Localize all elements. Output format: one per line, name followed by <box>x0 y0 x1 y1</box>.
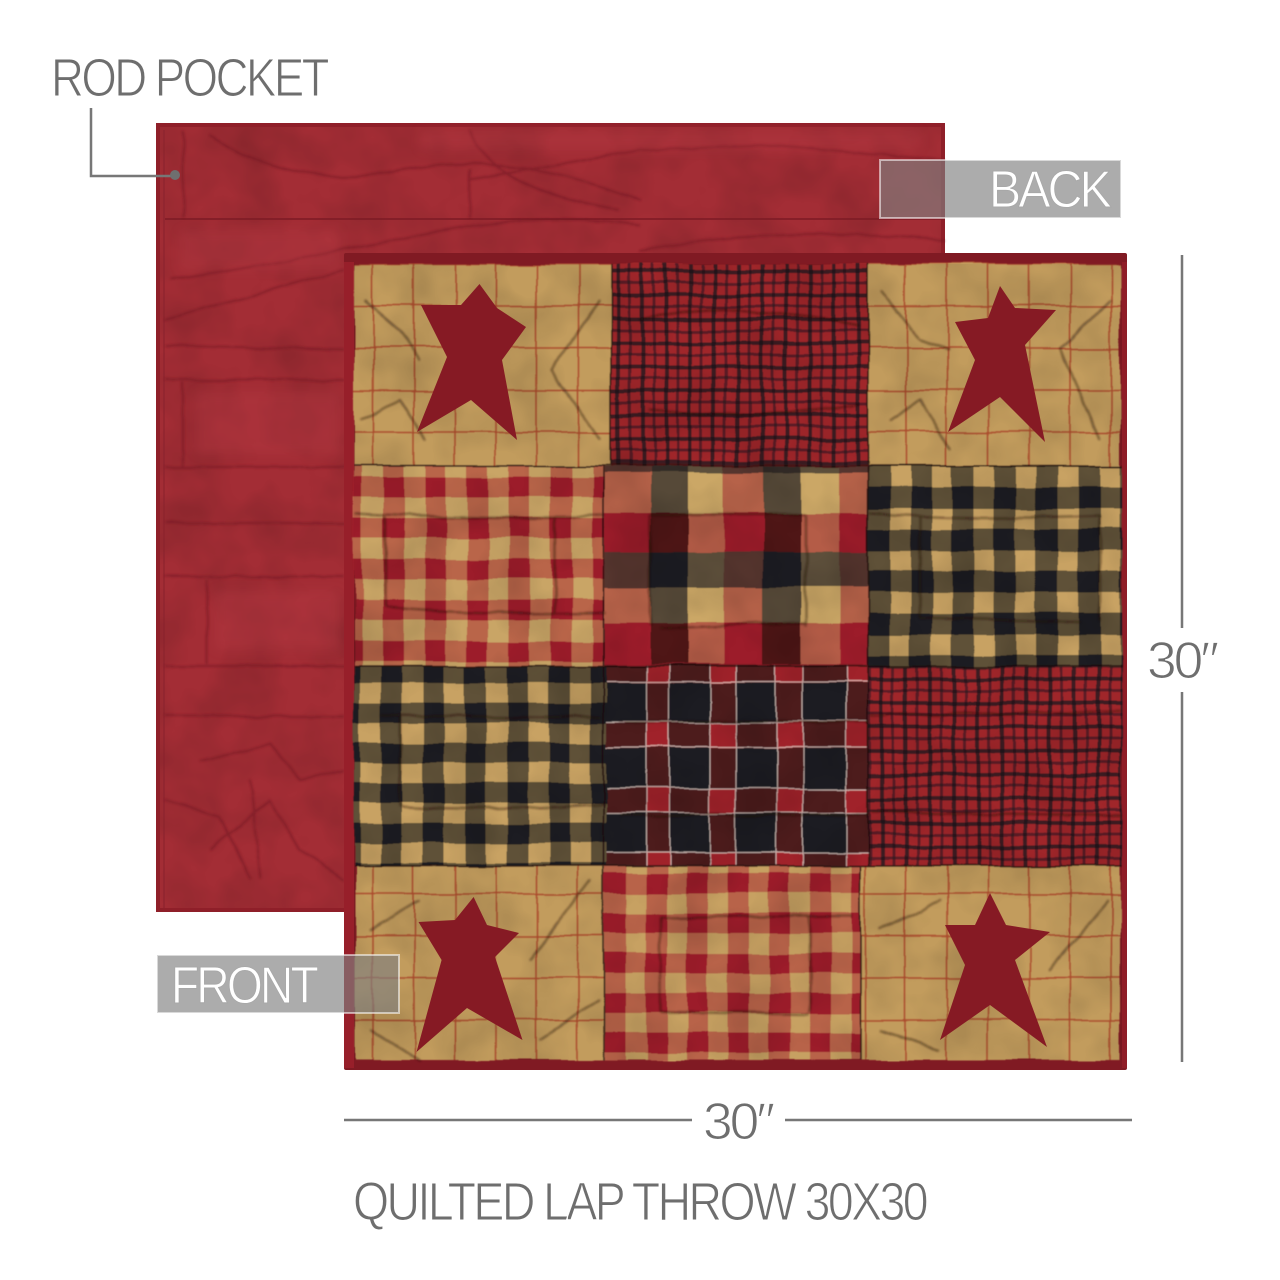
icon: star bottom left <box>416 897 522 1052</box>
label: front: FRONT <box>171 957 318 1015</box>
label: back <box>880 160 1121 219</box>
dimension: height 30 inches: 30″ <box>1147 632 1219 690</box>
icon: star top left <box>417 284 526 440</box>
quilt patches <box>354 264 1122 1060</box>
label: rod pocket <box>51 48 329 180</box>
patch row 1: star, plaid, star <box>354 264 1120 467</box>
patch row 3: black check, dark plaid, red plaid <box>354 665 1122 867</box>
dimension: width 30 inches: 30″ <box>703 1093 775 1151</box>
quilting wrinkles <box>354 290 1122 1060</box>
panel: quilt front <box>344 253 1127 1070</box>
title: QUILTED LAP THROW 30X30 <box>353 1172 927 1232</box>
icon: star bottom right <box>940 893 1050 1047</box>
callout line: rod pocket <box>91 108 180 180</box>
quilt binding <box>344 253 1127 1070</box>
patch seams <box>354 264 1122 1060</box>
label: rod pocket: ROD POCKET <box>51 48 329 108</box>
patch row 2: red check, mixed plaid, black check <box>354 466 1122 668</box>
label: back: BACK <box>989 161 1112 219</box>
panel: quilt back <box>156 123 945 912</box>
patch row 4: star, red check, star <box>356 866 1120 1060</box>
icon: star top right <box>948 286 1056 442</box>
label: front <box>157 955 399 1015</box>
